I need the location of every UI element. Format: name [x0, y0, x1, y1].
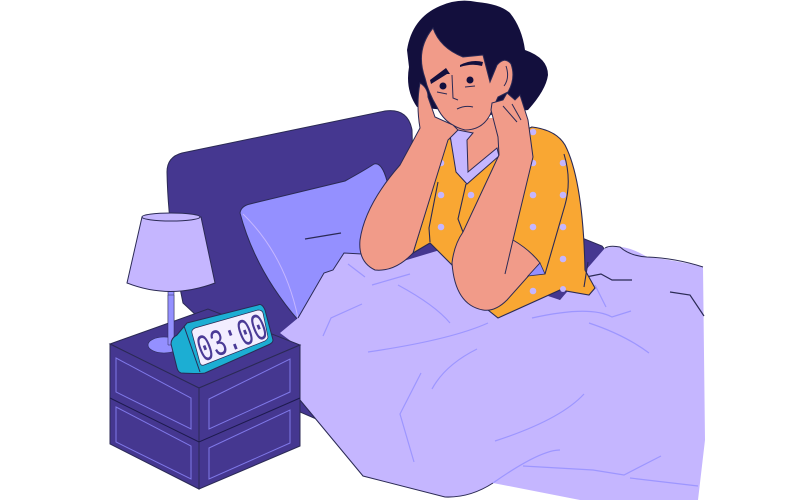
- sleeve lining: [528, 263, 545, 276]
- left arm and hand: [360, 83, 458, 270]
- shirt: [413, 127, 595, 318]
- collar: [450, 130, 499, 184]
- face: [421, 28, 513, 130]
- blanket: [280, 246, 705, 500]
- clock time: 03:00: [191, 307, 274, 373]
- pillow: [240, 164, 400, 320]
- right arm and hand: [452, 93, 540, 310]
- alarm clock: [171, 305, 274, 374]
- neck: [450, 118, 499, 182]
- nightstand: [110, 295, 300, 489]
- hair: [407, 1, 548, 115]
- bed headboard: [167, 111, 610, 425]
- lamp: [127, 213, 215, 340]
